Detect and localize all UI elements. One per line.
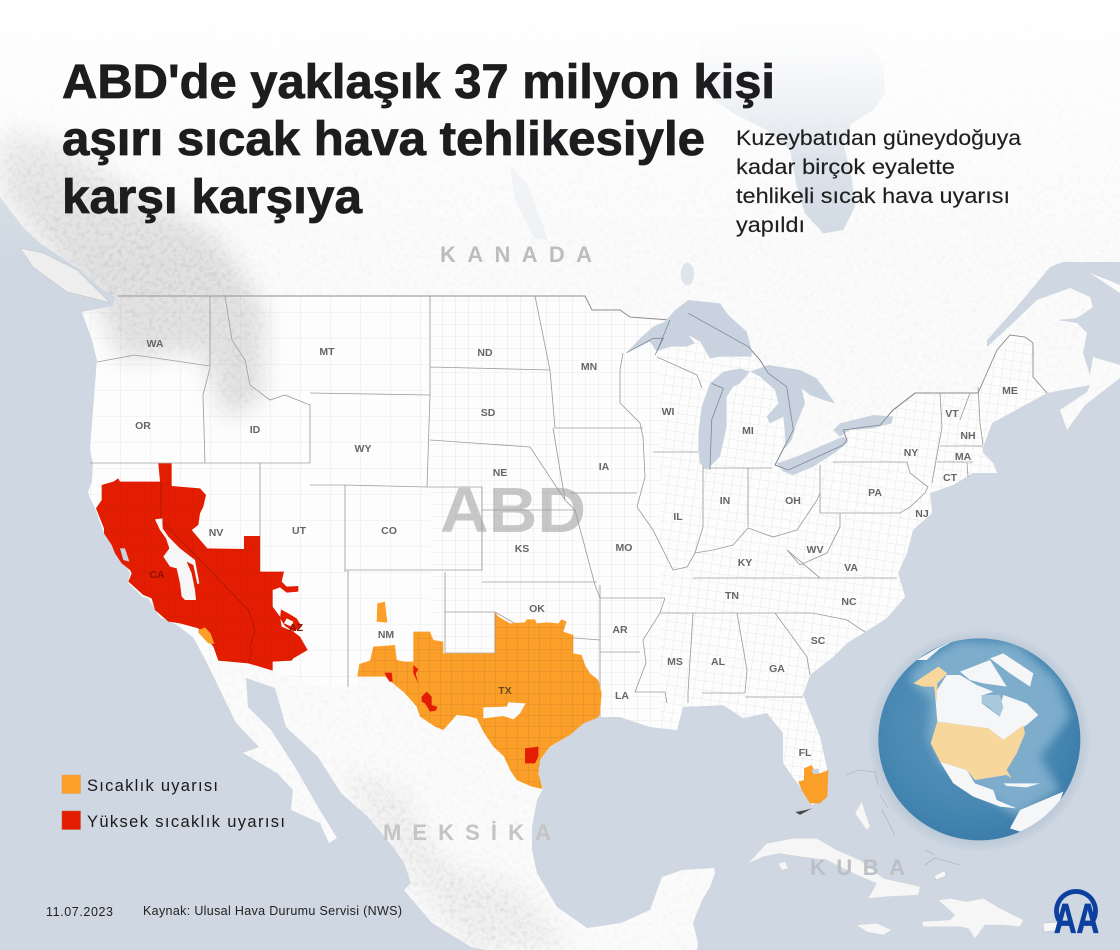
Lake Winnipeg	[510, 165, 548, 240]
legend	[62, 775, 285, 831]
continental shelf	[908, 640, 1070, 817]
Vancouver Island	[20, 248, 110, 303]
Hudson and James Bay	[700, 20, 885, 233]
Anticosti Island	[1090, 273, 1120, 293]
state labels: WI	[662, 406, 674, 418]
US-Canada border	[118, 296, 1047, 470]
state labels: NJ	[915, 508, 929, 520]
country label: ABD: ABD	[440, 474, 586, 546]
state labels: MA	[955, 451, 972, 463]
state labels: IN	[720, 495, 730, 507]
state labels: TN	[725, 590, 739, 602]
state labels: TX	[498, 685, 512, 697]
Caribbean islands	[748, 802, 1062, 938]
state labels: OR	[135, 420, 151, 432]
locator globe	[868, 629, 1091, 852]
title: aşırı sıcak hava tehlikesiyle	[62, 113, 705, 166]
state labels: FL	[799, 747, 812, 759]
state labels: SD	[481, 407, 496, 419]
title	[62, 56, 775, 224]
state labels: ID	[250, 424, 261, 436]
state labels: NE	[493, 467, 507, 479]
state labels: MN	[581, 361, 597, 373]
legend item: heat advisory: Sıcaklık uyarısı	[87, 777, 218, 795]
state labels: LA	[615, 690, 629, 702]
state labels: MO	[616, 542, 632, 554]
state labels: OK	[529, 603, 545, 615]
state labels: WV	[807, 544, 823, 556]
state labels: MT	[319, 346, 335, 358]
title: karşı karşıya	[62, 171, 362, 224]
state labels: UT	[292, 525, 307, 537]
subtitle	[736, 127, 1021, 237]
state labels: NM	[378, 629, 394, 641]
state labels: NC	[841, 596, 857, 608]
state labels: MS	[667, 656, 683, 668]
Bahamas outlines	[846, 770, 960, 865]
heat warning area: California, Nevada, Arizona	[96, 463, 308, 671]
country label: Kanada: KANADA	[440, 242, 592, 267]
state labels: IL	[673, 511, 683, 523]
state labels: AL	[711, 656, 726, 668]
legend item: excessive heat warning: Yüksek sıcaklık uyarısı	[87, 813, 285, 831]
top white fade	[0, 0, 1120, 265]
state labels: ME	[1002, 385, 1018, 397]
AA logo: AA	[1054, 895, 1099, 942]
state labels: WA	[147, 338, 164, 350]
state labels: NH	[960, 430, 976, 442]
country label: Meksika: MEKSİKA	[383, 820, 551, 845]
map: United States with county and state lines	[82, 296, 1048, 805]
subtitle: Kuzeybatıdan güneydoğuya	[736, 127, 1021, 150]
state labels: VA	[844, 562, 858, 574]
state labels: AR	[612, 624, 628, 636]
state labels: GA	[769, 663, 785, 675]
orange pocket in southern California	[198, 627, 214, 644]
state labels: NY	[904, 447, 918, 459]
state labels: WY	[355, 443, 371, 455]
state labels: PA	[868, 487, 882, 499]
title: ABD'de yaklaşık 37 milyon kişi	[62, 56, 775, 109]
terrain shading: northwest mountains and central Mexico	[0, 131, 558, 950]
state labels: VT	[945, 408, 959, 420]
country label: Küba: KUBA	[810, 855, 905, 880]
Great Lakes	[627, 263, 915, 475]
state labels: ND	[477, 347, 493, 359]
state labels: IA	[599, 461, 610, 473]
state labels: NV	[209, 527, 223, 539]
state labels: KY	[738, 557, 752, 569]
state labels: CO	[381, 525, 397, 537]
state labels: MI	[742, 425, 754, 437]
state labels: AZ	[289, 622, 304, 634]
heat advisory area: south Florida	[798, 765, 828, 803]
source: Kaynak: Ulusal Hava Durumu Servisi (NWS)	[143, 904, 402, 918]
state labels	[135, 338, 1018, 759]
state labels: KS	[515, 543, 529, 555]
subtitle: yapıldı	[736, 214, 805, 237]
subtitle: tehlikeli sıcak hava uyarısı	[736, 185, 1010, 208]
state labels: SC	[811, 635, 826, 647]
state labels: CA	[149, 569, 165, 581]
subtitle: kadar birçok eyalette	[736, 156, 955, 179]
heat advisory area: Texas and New Mexico	[357, 602, 602, 789]
state labels: CT	[943, 472, 958, 484]
date: 11.07.2023	[46, 905, 113, 919]
state labels: OH	[785, 495, 801, 507]
